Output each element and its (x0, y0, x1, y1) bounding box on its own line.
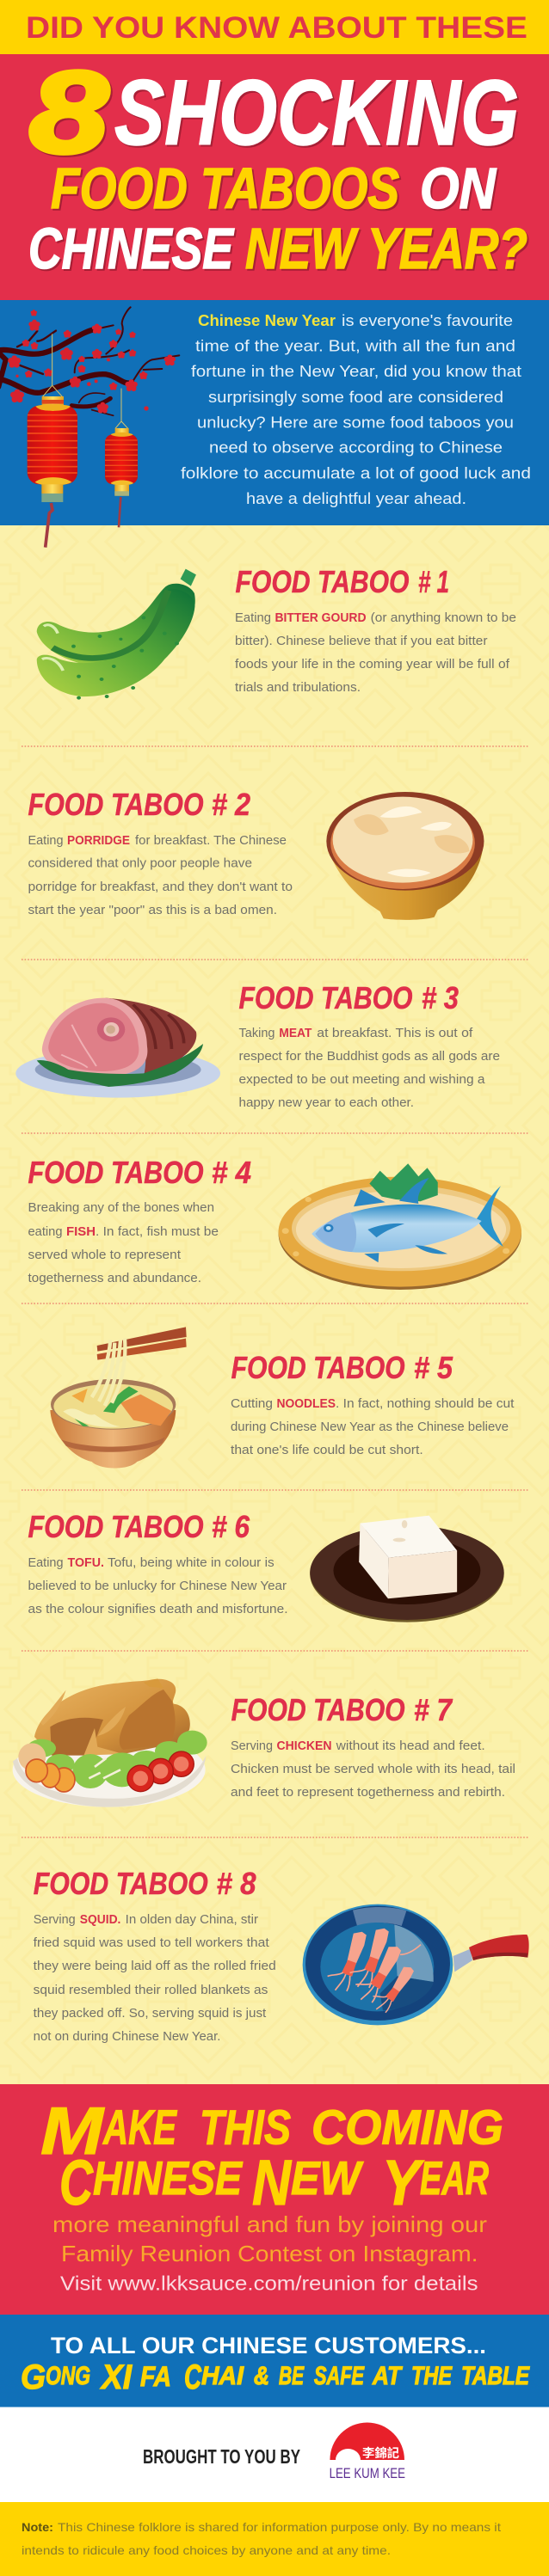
text: note: Note: (22, 2520, 53, 2534)
heading: gong xi fa chai (21, 2358, 530, 2396)
heading: taboo 5: FOOD TABOO (231, 1350, 405, 1385)
text block: intro copy: folklore to accumulate a lot of good luck and (181, 464, 531, 481)
heading: make this coming chinese new year: HINESE (93, 2151, 244, 2205)
panel: taboo 1 (37, 564, 516, 700)
text: taboo 1 body: BITTER GOURD (275, 611, 367, 625)
text: taboo 4 body: FISH (66, 1225, 96, 1239)
icon: fish on plate (279, 1163, 521, 1290)
text: taboo 1 body: bitter). Chinese believe that if you eat bitter (235, 635, 488, 648)
heading: taboo 2: # 2 (212, 787, 250, 822)
text: taboo 7 body: Serving (231, 1739, 273, 1753)
text: taboo 2 body: start the year "poor" as this is a bad omen. (28, 904, 277, 917)
icon: bitter gourd (37, 569, 196, 700)
logo: lee kum kee: LEE KUM KEE (330, 2466, 405, 2481)
heading: gong xi fa chai: AT (372, 2362, 403, 2390)
panel: taboos background (0, 525, 549, 2084)
icon: squid in pan (303, 1904, 529, 2025)
text: taboo 8 body: not on during Chinese New Year. (34, 2030, 220, 2044)
text: taboo 8 body: fried squid was used to tell workers that (34, 1936, 269, 1950)
text block: intro copy: time of the year. But, with all the fun and (195, 337, 515, 354)
heading: make this coming chinese new year (40, 2093, 503, 2218)
heading: make this coming chinese new year: N (252, 2147, 292, 2218)
text: taboo 7 body: Chicken must be served whole with its head, tail (231, 1763, 515, 1776)
text: taboo 5 body: . In fact, nothing should be cut (336, 1397, 515, 1411)
text: taboo 5 body (231, 1397, 515, 1457)
text: brought to you by: BROUGHT TO YOU BY (143, 2445, 300, 2468)
text: taboo 4 body (28, 1201, 219, 1285)
text block: intro copy: need to observe according to Chinese (209, 439, 503, 457)
heading: taboo 4: # 4 (212, 1155, 251, 1190)
heading: make this coming chinese new year: COMING (312, 2100, 503, 2155)
text: taboo 8 body: Serving (34, 1913, 76, 1927)
text: taboo 6 body: Tofu, being white in colour is (108, 1556, 274, 1570)
heading: taboo 3: # 3 (422, 980, 459, 1015)
logo: lee kum kee (330, 2423, 405, 2481)
heading: gong xi fa chai: HAI (201, 2362, 244, 2390)
text: taboo 4 body: eating (28, 1225, 62, 1239)
text: taboo 3 body: at breakfast. This is out of (317, 1027, 473, 1040)
text block: intro copy (181, 312, 531, 507)
panel: taboo 4 (28, 1155, 521, 1290)
text: taboo 7 body: and feet to represent togetherness and rebirth. (231, 1786, 505, 1800)
title: main headline: FOOD TABOOS (51, 156, 399, 221)
text: taboo 8 body: they packed off. So, serving squid is just (34, 2007, 266, 2021)
heading: gong xi fa chai: THE (411, 2362, 453, 2390)
heading: taboo 3: FOOD TABOO (239, 980, 413, 1015)
heading: taboo 4: FOOD TABOO (28, 1155, 203, 1190)
panel: taboo 8 (34, 1866, 529, 2044)
text: taboo 5 body: that one's life could be cut short. (231, 1444, 423, 1457)
text: taboo 4 body: togetherness and abundance. (28, 1272, 201, 1285)
heading: gong xi fa chai: FA (140, 2361, 171, 2392)
lantern small (105, 389, 138, 527)
icon: tofu on plate (310, 1516, 504, 1622)
text: taboo 6 body: believed to be unlucky for Chinese New Year (28, 1579, 287, 1593)
text block: intro copy: have a delightful year ahead. (246, 490, 466, 507)
blossoms (8, 310, 176, 414)
text: taboo 2 body: for breakfast. The Chinese (135, 834, 287, 848)
text: taboo 3 body: Taking (239, 1027, 275, 1040)
text block: intro copy: fortune in the New Year, did you know that (191, 363, 521, 380)
lantern large (28, 334, 77, 548)
panel: taboo 5 (50, 1327, 515, 1468)
text: taboo 2 body (28, 834, 293, 917)
heading: taboo 6: FOOD TABOO (28, 1509, 203, 1544)
branches (0, 307, 179, 415)
text: taboo 7 body: CHICKEN (277, 1739, 332, 1753)
text: contest copy: more meaningful and fun by joining our (52, 2211, 487, 2237)
text: taboo 1 body: Eating (235, 611, 271, 625)
text: taboo 2 body: porridge for breakfast, and they don't want to (28, 880, 293, 894)
icon: roast chicken (13, 1678, 207, 1807)
heading: gong xi fa chai: TABLE (461, 2362, 530, 2390)
panel: sponsor (0, 2407, 549, 2502)
text: taboo 2 body: considered that only poor people have (28, 856, 252, 870)
text: taboo 8 body: SQUID. (80, 1913, 120, 1927)
heading: gong xi fa chai: C (184, 2358, 202, 2396)
text: note: intends to ridicule any food choices by anyone and at any time. (22, 2543, 391, 2557)
heading: taboo 8: FOOD TABOO (34, 1866, 208, 1901)
text: taboo 6 body: as the colour signifies death and misfortune. (28, 1603, 287, 1616)
heading: make this coming chinese new year: EW (291, 2151, 364, 2205)
heading: gong xi fa chai: ONG (46, 2362, 90, 2390)
text: taboo 4 body: . In fact, fish must be (96, 1225, 219, 1239)
heading: make this coming chinese new year: EAR (420, 2151, 489, 2205)
title: main headline (28, 47, 527, 281)
heading: make this coming chinese new year: C (59, 2147, 94, 2218)
text: taboo 8 body: they were being laid off as the rolled fried (34, 1960, 276, 1973)
text: taboo 3 body (239, 1027, 500, 1110)
text: taboo 8 body: In olden day China, stir (126, 1913, 258, 1927)
text: taboo 1 body: (or anything known to be (371, 611, 516, 625)
text: note (22, 2520, 501, 2557)
heading: taboo 1: # 1 (418, 564, 449, 599)
text: contest copy (52, 2211, 487, 2295)
text: taboo 1 body (235, 611, 516, 695)
text: taboo 3 body: happy new year to each other. (239, 1096, 414, 1110)
text: contest copy: Family Reunion Contest on Instagram. (61, 2241, 478, 2266)
title: main headline: ON (420, 156, 497, 221)
panel: top banner (0, 0, 549, 54)
panel: taboo 2 (28, 787, 484, 920)
text: taboo 8 body: squid resembled their rolled blankets as (34, 1984, 268, 1997)
heading: make this coming chinese new year: THIS (200, 2100, 291, 2155)
text: taboo 5 body: during Chinese New Year as the Chinese believe (231, 1420, 509, 1434)
heading: make this coming chinese new year: Y (382, 2147, 424, 2218)
title: main headline: 8 (29, 47, 108, 177)
text: taboo 7 body (231, 1739, 515, 1800)
text: to all our customers: TO ALL OUR CHINESE CUSTOMERS... (51, 2333, 486, 2358)
text block: intro copy: is everyone's favourite (342, 312, 513, 329)
text block: intro copy: surprisingly some food are considered (208, 389, 503, 406)
panel: taboo 7 (13, 1678, 515, 1807)
text: taboo 5 body: Cutting (231, 1397, 273, 1411)
text: contest copy: Visit www.lkksauce.com/reunion for details (60, 2272, 478, 2295)
logo: lee kum kee: 李錦記 (362, 2446, 399, 2460)
text: taboo 6 body: Eating (28, 1556, 64, 1570)
heading: taboo 7: # 7 (414, 1692, 453, 1727)
text: taboo 2 body: Eating (28, 834, 64, 848)
text block: intro copy: Chinese New Year (198, 312, 336, 329)
panel: disclaimer note (0, 2502, 549, 2576)
heading: make this coming chinese new year: M (40, 2093, 105, 2168)
text: taboo 6 body: TOFU. (67, 1556, 104, 1570)
text: taboo 4 body: Breaking any of the bones when (28, 1201, 214, 1215)
heading: taboo 2: FOOD TABOO (28, 787, 203, 822)
heading: gong xi fa chai: BE (279, 2362, 305, 2390)
heading: taboo 5: # 5 (414, 1350, 453, 1385)
heading: taboo 7: FOOD TABOO (231, 1692, 405, 1727)
text: taboo 1 body: foods your life in the coming year will be full of (235, 658, 510, 672)
text: taboo 3 body: respect for the Buddhist gods as all gods are (239, 1050, 500, 1064)
heading: gong xi fa chai: SAFE (314, 2362, 365, 2390)
text: taboo 8 body (34, 1913, 276, 2044)
heading: taboo 1: FOOD TABOO (236, 564, 410, 599)
text: taboo 5 body: NOODLES (277, 1397, 336, 1411)
text: note: This Chinese folklore is shared for information purpose only. By no means it (58, 2520, 501, 2534)
heading: gong xi fa chai: & (254, 2362, 269, 2390)
text: taboo 2 body: PORRIDGE (67, 834, 130, 848)
panel: taboo 6 (28, 1509, 504, 1622)
heading: taboo 6: # 6 (212, 1509, 250, 1544)
text: taboo 3 body: MEAT (279, 1027, 312, 1040)
icon: noodle bowl (50, 1327, 187, 1468)
heading: taboo 8: # 8 (217, 1866, 256, 1901)
panel: intro (0, 300, 549, 525)
panel: title (0, 47, 549, 300)
text: taboo 3 body: expected to be out meeting and wishing a (239, 1073, 485, 1087)
heading: gong xi fa chai: G (21, 2358, 46, 2396)
text: taboo 6 body (28, 1556, 287, 1616)
icon: ham (15, 998, 220, 1098)
text: taboo 4 body: served whole to represent (28, 1248, 181, 1262)
panel: taboo 3 (15, 980, 500, 1110)
text: taboo 1 body: trials and tribulations. (235, 681, 361, 695)
heading: make this coming chinese new year: AKE (102, 2100, 177, 2155)
icon: porridge bowl (326, 792, 484, 920)
title: main headline: CHINESE (28, 217, 235, 281)
panel: greeting (0, 2315, 549, 2407)
text: taboo 7 body: without its head and feet. (336, 1739, 485, 1753)
text block: intro copy: unlucky? Here are some food taboos you (197, 414, 514, 431)
heading: did you know: DID YOU KNOW ABOUT THESE (26, 11, 527, 45)
illustration: blossom branch and lanterns (0, 307, 179, 548)
panel: call to action (0, 2084, 549, 2315)
heading: gong xi fa chai: XI (100, 2358, 133, 2396)
